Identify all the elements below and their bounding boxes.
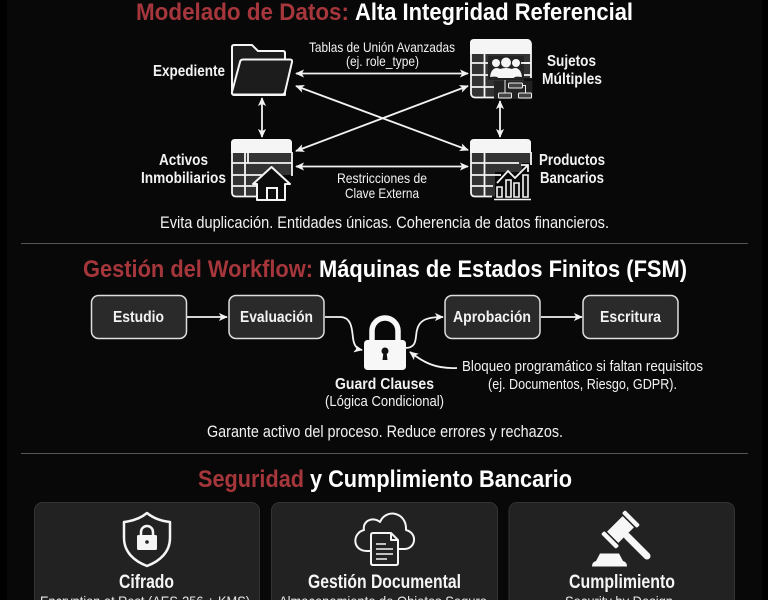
title: seguridad (198, 466, 572, 493)
title: gestion del workflow (83, 256, 687, 283)
text: data model summary: Evita duplicación. Entidades únicas. Coherencia de datos financieros. (160, 214, 609, 232)
label: guard clauses (325, 376, 444, 410)
label: expediente: Expediente (153, 63, 225, 80)
label: tablas de union: Tablas de Unión Avanzadas (309, 39, 455, 55)
arrow: estudio to evaluacion (187, 316, 227, 318)
label: activos inmobiliarios: Activos (159, 152, 208, 169)
label: restricciones: Restricciones de (337, 170, 427, 186)
icon: table with chart (470, 139, 531, 200)
label: productos bancarios (539, 152, 605, 187)
label: tablas de union: (ej. role_type) (346, 53, 419, 69)
arrow: evaluacion to lock (325, 317, 362, 350)
state: aprobacion (445, 296, 540, 338)
icon: padlock (364, 318, 406, 370)
panel: gestion documental: Gestión Documental (308, 572, 461, 593)
label: activos inmobiliarios (141, 152, 226, 187)
state: aprobacion: Aprobación (453, 309, 531, 326)
label: sujetos multiples: Múltiples (542, 71, 602, 88)
state: evaluacion: Evaluación (240, 309, 313, 326)
text: block note (462, 358, 703, 393)
icon: folder (232, 45, 292, 95)
icon: table with house (231, 139, 292, 200)
label: productos bancarios: Productos (539, 152, 605, 169)
text: block note: (ej. Documentos, Riesgo, GDPR). (488, 376, 677, 393)
text: block note: Bloqueo programático si faltan requisitos (462, 358, 703, 375)
label: guard clauses: Guard Clauses (335, 376, 434, 393)
panel: cifrado (34, 502, 260, 600)
arrow: block note to lock (410, 352, 457, 368)
title: modelado de datos (136, 0, 633, 26)
label: productos bancarios: Bancarios (540, 170, 604, 187)
label: activos inmobiliarios: Inmobiliarios (141, 170, 226, 187)
panel: cifrado: Cifrado (119, 572, 174, 593)
title: seguridad: y Cumplimiento Bancario (310, 466, 572, 493)
title: seguridad: Seguridad (198, 466, 304, 493)
label: restricciones (337, 170, 427, 201)
label: sujetos multiples: Sujetos (547, 53, 596, 70)
text: workflow summary: Garante activo del proceso. Reduce errores y rechazos. (207, 423, 563, 441)
arrow: aprobacion to escritura (541, 316, 582, 318)
label: tablas de union (309, 39, 455, 69)
panel: cumplimiento (509, 502, 734, 600)
icon: shield with lock (124, 513, 170, 566)
icon: gavel (592, 510, 662, 571)
state: escritura (583, 296, 678, 338)
label: sujetos multiples (542, 53, 602, 88)
state: escritura: Escritura (600, 309, 661, 326)
state: estudio (92, 296, 186, 338)
icon: table with people (470, 39, 533, 100)
state: evaluacion (229, 296, 324, 338)
panel: gestion documental (272, 502, 498, 600)
label: guard clauses: (Lógica Condicional) (325, 393, 444, 410)
arrows: data model relations (262, 74, 500, 166)
panel: cumplimiento: Cumplimiento (569, 572, 675, 593)
arrow: lock to aprobacion (405, 317, 443, 348)
state: estudio: Estudio (113, 309, 164, 326)
icon: cloud document (355, 514, 414, 565)
title: gestion del workflow: Máquinas de Estados Finitos (FSM) (319, 256, 687, 283)
title: gestion del workflow: Gestión del Workflow: (83, 256, 313, 283)
label: restricciones: Clave Externa (345, 185, 419, 201)
